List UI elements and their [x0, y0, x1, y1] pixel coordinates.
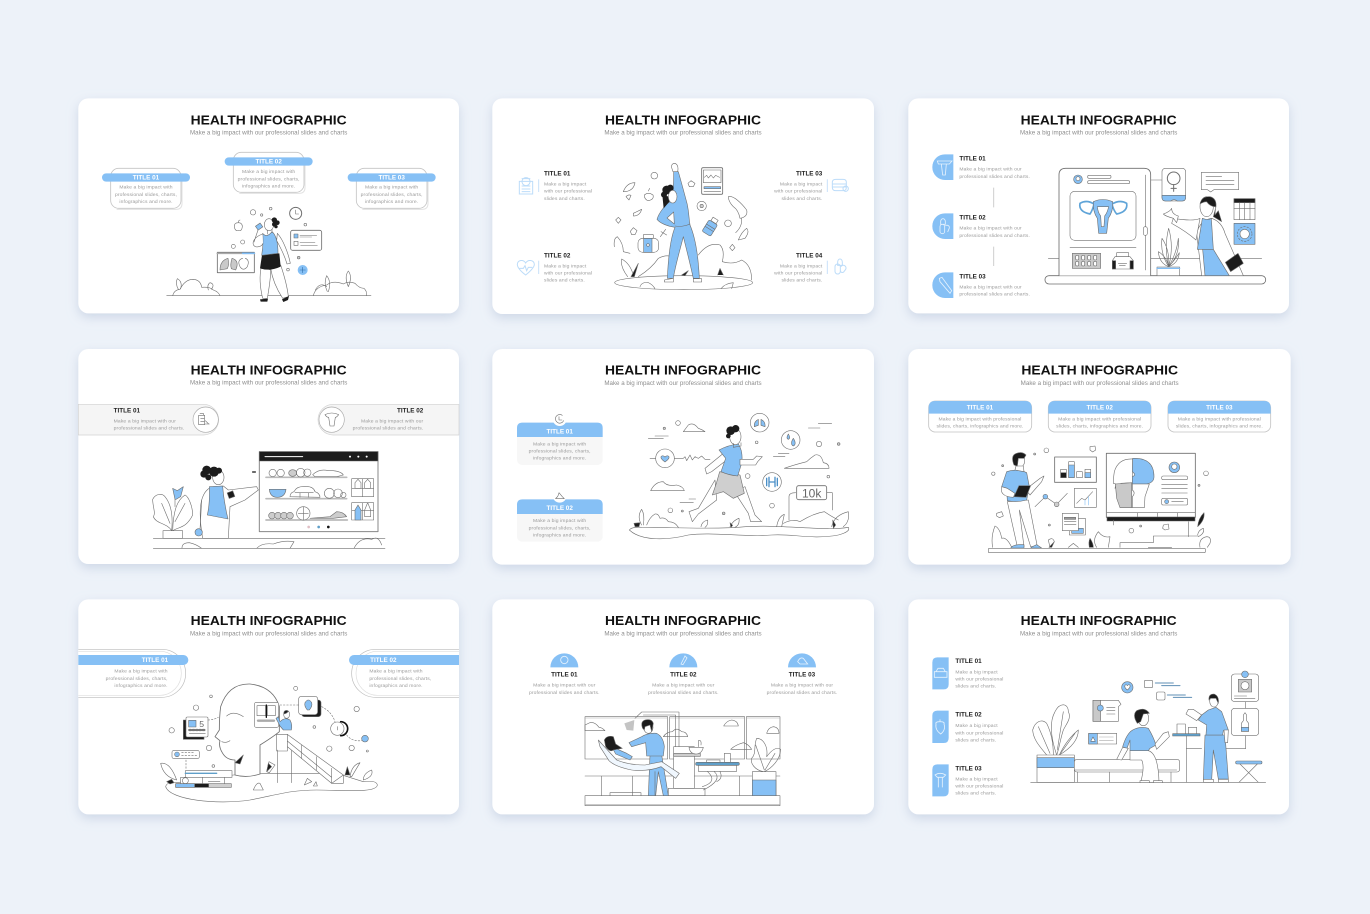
illustration: woman drinking with health icons	[167, 207, 371, 302]
card: title 02	[1048, 401, 1151, 432]
panel: slide 9, consultation	[908, 599, 1289, 814]
callout: title 01: Make a big impact with	[119, 185, 173, 191]
item: title 03	[932, 764, 1004, 797]
icon: pill jar	[1112, 253, 1133, 269]
card: alert	[1089, 733, 1117, 744]
illustration: doctor and patient consultation	[1031, 671, 1266, 783]
item: title 01: Make a big impact	[955, 669, 998, 675]
figure: woman	[253, 217, 290, 302]
item: title 02: slides and charts.	[544, 278, 585, 284]
subtitle: Make a big impact with our professional slides and charts	[604, 631, 762, 637]
basin	[689, 740, 703, 754]
callout: title 03: infographics and more.	[365, 199, 418, 205]
figure: seated patient	[1117, 709, 1169, 783]
item: title 02: with our professional	[544, 271, 592, 277]
panel: slide 8, dental clinic	[492, 599, 874, 814]
icon: blister pack	[1072, 253, 1101, 268]
item: title 03	[767, 653, 837, 696]
panel: slide 6, head puzzle	[908, 349, 1291, 565]
icon: water drops	[781, 431, 800, 449]
item: title 03: TITLE 03	[955, 765, 982, 772]
icon: female symbol card	[1162, 168, 1186, 201]
card: title 01: TITLE 01	[546, 428, 573, 435]
card: title 02: Make a big impact with professional	[1058, 416, 1141, 422]
card: title 02: Make a big impact with	[533, 518, 586, 524]
item: title 03: TITLE 03	[959, 274, 986, 281]
subtitle: Make a big impact with our professional slides and charts	[190, 131, 347, 137]
item: title 01: Make a big impact with our	[959, 167, 1022, 173]
bench	[1074, 759, 1180, 782]
item: title 02	[932, 711, 1004, 743]
callout: title 03: TITLE 03	[378, 174, 405, 181]
callout: title 02: infographics and more.	[242, 183, 295, 189]
card: profile note	[1093, 700, 1121, 721]
figure: small person at book	[276, 710, 292, 730]
card: title 02: infographics and more.	[533, 532, 586, 538]
illustration: person with charts and head puzzle	[988, 446, 1210, 553]
card: title 02: TITLE 02	[1086, 404, 1113, 411]
icon: light bulb	[299, 696, 321, 717]
title: HEALTH INFOGRAPHIC	[605, 112, 761, 127]
banner: title 02: TITLE 02	[397, 407, 424, 414]
card: title 01	[929, 401, 1032, 432]
callout: title 01: professional slides, charts,	[106, 676, 168, 682]
item: title 03	[774, 170, 848, 202]
item: title 01: with our professional	[955, 677, 1004, 683]
icon: lungs and heart screen	[217, 252, 254, 273]
instrument tray	[696, 753, 739, 790]
callout: title 02: TITLE 02	[255, 158, 282, 165]
potted plant	[1033, 705, 1078, 782]
callout: title 02: professional slides, charts,	[238, 176, 300, 182]
item: title 02: TITLE 02	[955, 712, 982, 719]
books	[176, 771, 232, 787]
item: title 02: TITLE 02	[959, 215, 986, 222]
item: title 03: Make a big impact with our	[771, 683, 833, 689]
callout: title 02: Make a big impact with	[242, 169, 295, 175]
figure: doctor	[1163, 197, 1243, 276]
item: title 01: TITLE 01	[955, 658, 982, 665]
sign: 10k: 10k	[802, 486, 822, 500]
icon: heart badge	[1122, 682, 1133, 693]
floor	[585, 796, 780, 806]
item: title 03: TITLE 03	[789, 672, 816, 679]
item: title 03: professional slides and charts.	[959, 292, 1030, 298]
illustration: dentist and patient	[585, 712, 781, 806]
callout: title 02: professional slides, charts,	[369, 676, 431, 682]
icon: monitor card	[702, 168, 723, 194]
stool	[1236, 761, 1262, 782]
banner: title 02	[318, 404, 459, 435]
callout: title 02	[225, 152, 313, 193]
icon: lungs	[750, 413, 769, 432]
stairs	[277, 734, 343, 783]
item: title 01: Make a big impact	[544, 182, 587, 188]
item: title 02: with our professional	[955, 730, 1004, 736]
item: title 02	[932, 213, 1030, 239]
subtitle: Make a big impact with our professional slides and charts	[1021, 381, 1179, 387]
card: number 5	[183, 717, 208, 739]
illustration: uterus screen and doctor	[1045, 168, 1266, 284]
item: title 01	[519, 170, 592, 202]
illustration: woman at grocery screen	[153, 452, 385, 548]
item: title 03: Make a big impact	[955, 777, 998, 783]
screen: uterus diagram	[1070, 191, 1136, 240]
card: title 03: slides, charts, infographics and more.	[1176, 423, 1263, 429]
item: title 02: professional slides and charts.	[648, 690, 719, 696]
card: title 02: TITLE 02	[546, 505, 573, 512]
item: title 02: Make a big impact with our	[959, 226, 1022, 232]
card: title 03	[1168, 401, 1271, 432]
head outline	[215, 684, 279, 776]
icon: blue water bottle	[702, 216, 720, 236]
title: HEALTH INFOGRAPHIC	[1021, 112, 1177, 127]
subtitle: Make a big impact with our professional slides and charts	[1020, 631, 1177, 637]
item: title 01: TITLE 01	[959, 156, 986, 163]
panel: slide 3, gynecology doctor	[908, 98, 1289, 313]
item: title 01	[529, 653, 600, 696]
card: title 01: slides, charts, infographics and more.	[936, 423, 1023, 429]
item: title 04: TITLE 04	[796, 252, 823, 259]
subtitle: Make a big impact with our professional slides and charts	[1020, 131, 1177, 137]
callout: title 01: Make a big impact with	[114, 669, 168, 675]
checklist	[1144, 680, 1192, 700]
card: title 02: slides, charts, infographics and more.	[1056, 423, 1143, 429]
item: title 01: Make a big impact with our	[533, 683, 596, 689]
card: chat profile	[172, 750, 199, 770]
figure: dentist	[629, 720, 668, 796]
card: number 5: 5	[199, 719, 204, 729]
illustration: runner with health icons	[629, 413, 849, 539]
item: title 03: slides and charts.	[781, 196, 822, 202]
panel: slide 4, healthy food shelf	[78, 349, 459, 564]
item: title 01: TITLE 01	[544, 170, 571, 177]
card: title 01: professional slides, charts,	[529, 449, 591, 455]
item: title 01: professional slides and charts.	[959, 174, 1030, 180]
item: title 01: slides and charts.	[544, 196, 585, 202]
icon: heart	[656, 449, 674, 468]
item: title 03: TITLE 03	[796, 170, 823, 177]
item: title 02: TITLE 02	[670, 672, 697, 679]
title: HEALTH INFOGRAPHIC	[1021, 613, 1177, 628]
callout: title 02: infographics and more.	[369, 683, 423, 689]
figure: woman from behind	[195, 466, 258, 538]
callout: title 01: infographics and more.	[114, 683, 168, 689]
callout: title 02: Make a big impact with	[369, 669, 423, 675]
callout: title 02	[349, 649, 459, 697]
card: title 02: professional slides, charts,	[529, 525, 591, 531]
item: title 01: slides and charts.	[955, 684, 996, 690]
callout: title 01: infographics and more.	[119, 199, 173, 205]
card: title 01: TITLE 01	[967, 404, 994, 411]
item: title 02: slides and charts.	[955, 737, 996, 743]
card: title 01: Make a big impact with professional	[938, 416, 1022, 422]
item: title 03: Make a big impact with our	[959, 285, 1022, 291]
icon: dumbbell	[763, 473, 781, 491]
chart: line with dots	[1035, 493, 1067, 507]
banner: title 01: TITLE 01	[114, 407, 141, 414]
icon: dial card	[1231, 671, 1259, 702]
item: title 02: Make a big impact with our	[652, 683, 715, 689]
item: title 03: with our professional	[955, 784, 1004, 790]
card: open book	[254, 702, 279, 727]
callout: title 02: TITLE 02	[370, 657, 397, 664]
icon: medicine bag	[638, 234, 659, 252]
subtitle: Make a big impact with our professional slides and charts	[190, 631, 347, 637]
food screen	[259, 452, 378, 532]
documents	[1062, 513, 1085, 535]
icon: checklist card	[291, 230, 322, 250]
subtitle: Make a big impact with our professional slides and charts	[604, 131, 762, 137]
figure: standing doctor	[1186, 694, 1228, 782]
banner: title 01: Make a big impact with our	[114, 418, 176, 424]
chair base	[610, 747, 705, 796]
card: title 01: Make a big impact with	[533, 441, 586, 447]
item: title 02	[648, 653, 719, 696]
item: title 04: Make a big impact	[780, 263, 823, 269]
title: HEALTH INFOGRAPHIC	[191, 112, 347, 127]
callout: title 01: professional slides, charts,	[115, 192, 177, 198]
windows	[585, 717, 780, 759]
item: title 02: professional slides and charts.	[959, 233, 1030, 239]
subtitle: Make a big impact with our professional slides and charts	[604, 381, 762, 387]
dental lamp	[624, 712, 679, 757]
panel: slide 2, stretching figure	[492, 98, 874, 314]
item: title 03: with our professional	[774, 189, 822, 195]
title: HEALTH INFOGRAPHIC	[605, 363, 761, 378]
dial	[331, 722, 348, 736]
item: title 03: Make a big impact	[780, 182, 823, 188]
callout: title 03: Make a big impact with	[365, 185, 418, 191]
figure: patient chair	[598, 736, 679, 796]
figure: stretching person	[657, 163, 702, 282]
sign: 10k	[797, 486, 827, 500]
panel: slide 1, woman drinking water	[78, 98, 459, 313]
screen: head puzzle	[1106, 453, 1195, 537]
item: title 01: professional slides and charts.	[529, 690, 600, 696]
item: title 01: with our professional	[544, 189, 592, 195]
card: title 01: infographics and more.	[533, 456, 586, 462]
figure: runner	[689, 425, 762, 522]
item: title 02	[517, 252, 592, 284]
subtitle: Make a big impact with our professional slides and charts	[190, 381, 347, 387]
title: HEALTH INFOGRAPHIC	[1021, 363, 1178, 378]
banner: title 01: professional slides and charts.	[114, 426, 184, 432]
callout: title 01	[78, 649, 188, 697]
item: title 04: slides and charts.	[781, 278, 822, 284]
side table	[1173, 724, 1200, 782]
panel: slide 5, runner	[492, 349, 874, 565]
icon: sun chart	[1234, 223, 1255, 244]
figure: standing person with tablet	[1001, 453, 1044, 548]
item: title 03: professional slides and charts.	[767, 690, 837, 696]
item: title 02: Make a big impact	[544, 263, 587, 269]
speech bubble	[1201, 172, 1239, 192]
icon: calendar grid	[1234, 199, 1255, 220]
chart: bars	[1055, 457, 1096, 482]
callout: title 03	[348, 168, 436, 209]
panel: slide 7, head and stairs	[78, 599, 459, 814]
plant	[1157, 228, 1180, 276]
potted plant	[751, 738, 781, 796]
banner: title 02: professional slides and charts.	[353, 426, 423, 432]
callout: title 01	[102, 168, 190, 209]
callout: title 01: TITLE 01	[142, 657, 169, 664]
illustration: head with stairs and books	[161, 684, 377, 802]
illustration: stretching person with health icons	[614, 163, 753, 290]
item: title 04	[774, 252, 846, 284]
check badge	[362, 735, 368, 742]
card: title 03: TITLE 03	[1206, 404, 1233, 411]
callout: title 01: TITLE 01	[133, 174, 160, 181]
chart: trend	[1074, 488, 1096, 507]
icon: plus badge	[298, 265, 308, 275]
item: title 01	[932, 154, 1030, 180]
card: title 02	[517, 489, 603, 542]
item: title 02: TITLE 02	[544, 252, 571, 259]
callout: title 03: professional slides, charts,	[361, 192, 423, 198]
card: title 01	[517, 412, 603, 465]
title: HEALTH INFOGRAPHIC	[191, 613, 347, 628]
title: HEALTH INFOGRAPHIC	[605, 613, 761, 628]
plant	[153, 487, 193, 538]
item: title 01	[932, 657, 1004, 690]
card: title 03: Make a big impact with professional	[1178, 416, 1261, 422]
banner: title 01	[78, 404, 219, 435]
item: title 01: TITLE 01	[551, 672, 578, 679]
icon: bottle card	[1231, 708, 1259, 736]
title: HEALTH INFOGRAPHIC	[191, 362, 347, 377]
item: title 03: slides and charts.	[955, 791, 996, 797]
banner: title 02: Make a big impact with our	[361, 418, 424, 424]
item: title 03	[932, 272, 1030, 298]
item: title 02: Make a big impact	[955, 723, 998, 729]
item: title 04: with our professional	[774, 271, 822, 277]
